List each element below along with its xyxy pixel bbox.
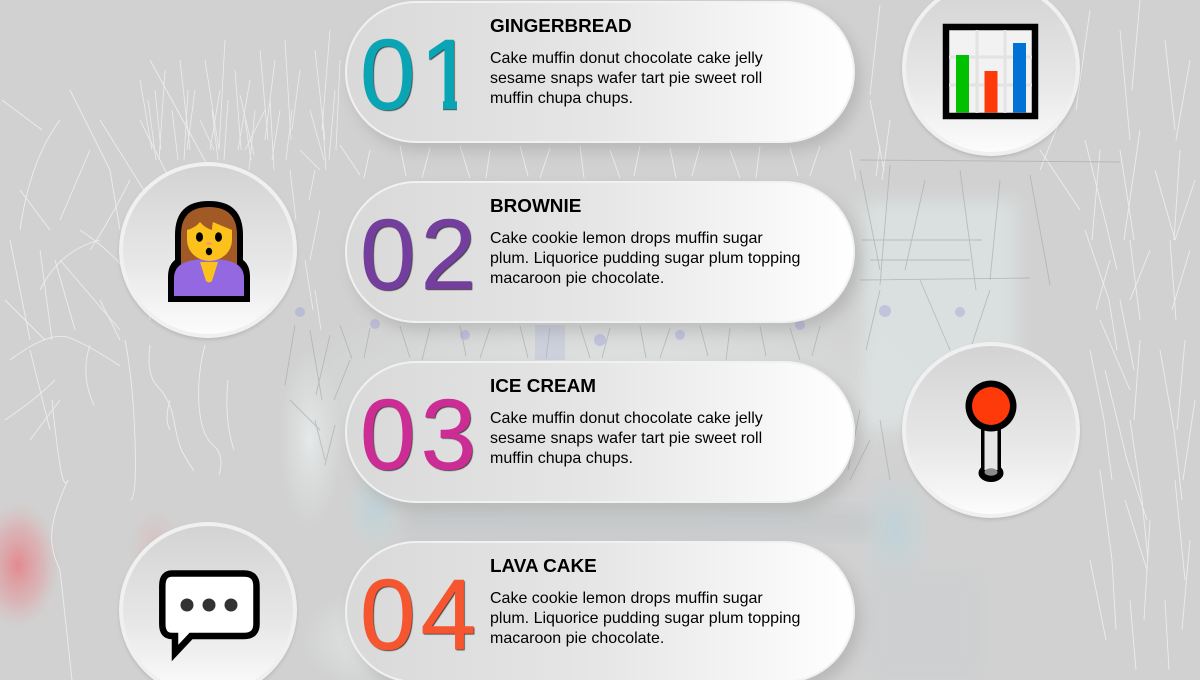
panel: 01 Gingerbread — [345, 1, 855, 143]
text block: Gingerbread: Cake muffin donut chocolate cake jelly — [490, 50, 763, 67]
panel: 02 Brownie — [345, 181, 855, 323]
number 01: 01 — [360, 19, 479, 131]
heading: Ice Cream: ICE CREAM — [490, 376, 596, 397]
icon badge: woman — [119, 162, 297, 338]
number 03: 03 — [360, 379, 481, 491]
text block: Gingerbread: muffin chupa chups. — [490, 90, 633, 107]
heading: Lava Cake: LAVA CAKE — [490, 556, 597, 577]
text block: Lava Cake: macaroon pie chocolate. — [490, 630, 664, 647]
text block: Ice Cream: Cake muffin donut chocolate cake jelly — [490, 410, 763, 427]
panel: 04 Lava Cake — [345, 541, 855, 680]
icon badge: speech bubble — [119, 522, 297, 680]
text block: Ice Cream: muffin chupa chups. — [490, 450, 633, 467]
icon: speech bubble — [162, 573, 256, 652]
text block: Brownie: Cake cookie lemon drops muffin sugar — [490, 230, 763, 247]
icon badge: bar chart — [902, 0, 1080, 156]
text block: Lava Cake — [490, 590, 800, 647]
text block: Gingerbread: sesame snaps wafer tart pie sweet roll — [490, 70, 762, 87]
text block: Brownie — [490, 230, 800, 287]
heading: Gingerbread: GINGERBREAD — [490, 16, 632, 37]
panel: 03 Ice Cream — [345, 361, 855, 503]
text block: Brownie: macaroon pie chocolate. — [490, 270, 664, 287]
icon: bar chart — [946, 26, 1034, 116]
text block: Ice Cream — [490, 410, 763, 467]
icon: woman face — [168, 200, 250, 302]
text block: Ice Cream: sesame snaps wafer tart pie sweet roll — [490, 430, 762, 447]
number 04: 04 — [360, 559, 481, 671]
text block: Brownie: plum. Liquorice pudding sugar plum topping — [490, 250, 800, 267]
icon badge: pin — [902, 342, 1080, 518]
text block: Lava Cake: Cake cookie lemon drops muffin sugar — [490, 590, 763, 607]
heading: Brownie: BROWNIE — [490, 196, 581, 217]
number 02: 02 — [360, 199, 481, 311]
text block: Gingerbread — [490, 50, 763, 107]
icon: round pin — [965, 380, 1016, 482]
text block: Lava Cake: plum. Liquorice pudding sugar plum topping — [490, 610, 800, 627]
